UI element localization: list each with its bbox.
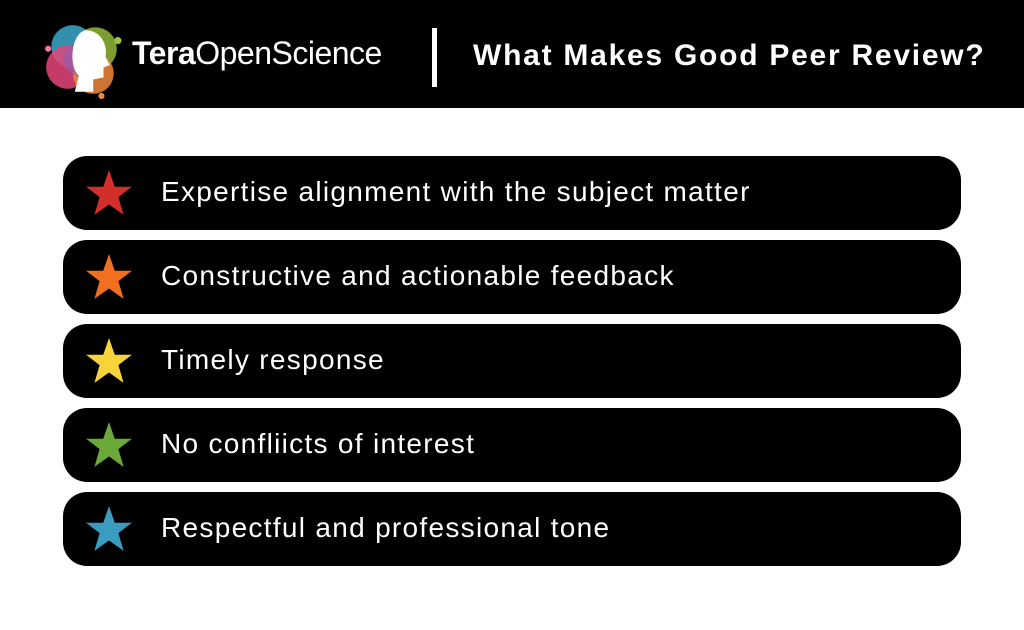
row 4: No confliicts of interest — [161, 428, 475, 459]
header bar — [0, 0, 1024, 108]
row 3: Timely response — [161, 344, 385, 375]
row 2 — [63, 240, 961, 314]
row 2: Constructive and actionable feedback — [161, 260, 675, 291]
icon: logo — [45, 25, 122, 99]
logo text: TeraOpenScience — [132, 35, 382, 71]
divider — [432, 28, 437, 87]
row 4 — [63, 408, 961, 482]
row 1: Expertise alignment with the subject matter — [161, 176, 751, 207]
row 3 — [63, 324, 961, 398]
row 1 — [63, 156, 961, 230]
title: What Makes Good Peer Review? — [473, 39, 985, 72]
row 5: Respectful and professional tone — [161, 512, 610, 543]
row 5 — [63, 492, 961, 566]
